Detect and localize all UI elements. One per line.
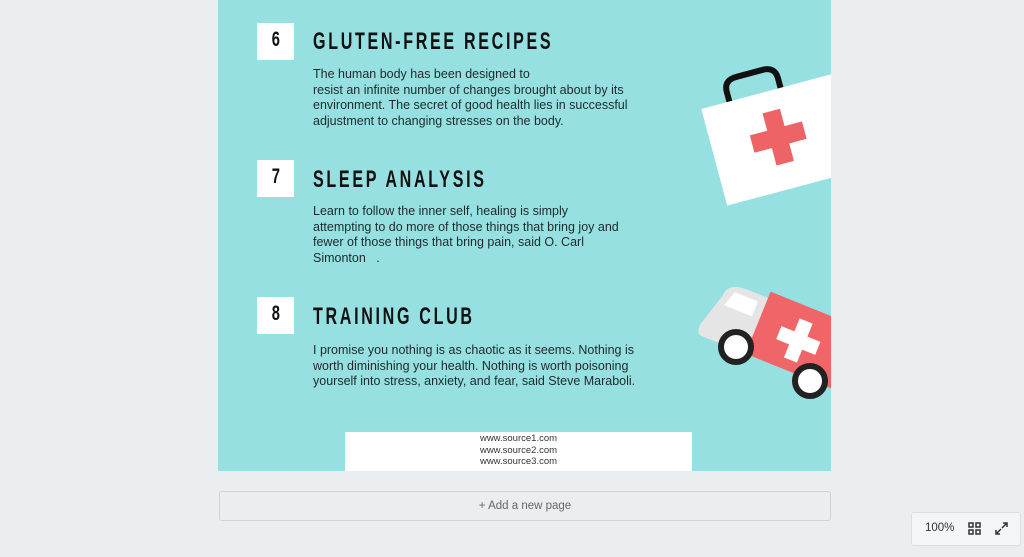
- panel: page: [218, 0, 831, 471]
- heading 6: GLUTEN-FREE RECIPES: [313, 28, 553, 55]
- text 7: Simonton .: [313, 251, 380, 265]
- text 8: worth diminishing your health. Nothing is worth poisoning: [313, 359, 628, 373]
- icon: ambulance: [698, 286, 831, 399]
- text 8: I promise you nothing is as chaotic as it seems. Nothing is: [313, 343, 634, 357]
- text 7: [313, 204, 619, 265]
- zoom controls: [911, 512, 1021, 546]
- text 8: [313, 343, 635, 388]
- add page button: [219, 491, 831, 521]
- icon: fullscreen: [995, 522, 1008, 535]
- text 7: attempting to do more of those things that bring joy and: [313, 220, 619, 234]
- text 7: Learn to follow the inner self, healing is simply: [313, 204, 568, 218]
- text 6: [313, 67, 628, 128]
- number 8: 8: [271, 302, 280, 325]
- zoom controls: 100%: [925, 522, 954, 534]
- heading 8: TRAINING CLUB: [313, 303, 475, 330]
- text 6: The human body has been designed to: [313, 67, 530, 81]
- text 6: resist an infinite number of changes brought about by its: [313, 83, 624, 97]
- text 8: yourself into stress, anxiety, and fear, said Steve Maraboli.: [313, 374, 635, 388]
- number 6: [257, 23, 294, 60]
- text 7: fewer of those things that bring pain, said O. Carl: [313, 235, 584, 249]
- heading 7: SLEEP ANALYSIS: [313, 166, 487, 193]
- icon: first aid kit: [701, 66, 831, 206]
- icon: grid: [968, 522, 981, 535]
- add page button: + Add a new page: [479, 500, 571, 512]
- number 7: 7: [271, 165, 280, 188]
- sources box: [345, 432, 692, 472]
- sources box: www.source2.com: [480, 444, 557, 456]
- sources box: www.source3.com: [480, 456, 557, 467]
- number 6: 6: [271, 28, 280, 51]
- text 6: environment. The secret of good health lies in successful: [313, 98, 628, 112]
- number 8: [257, 297, 294, 334]
- text 6: adjustment to changing stresses on the body.: [313, 114, 564, 128]
- number 7: [257, 160, 294, 197]
- sources box: www.source1.com: [480, 433, 557, 444]
